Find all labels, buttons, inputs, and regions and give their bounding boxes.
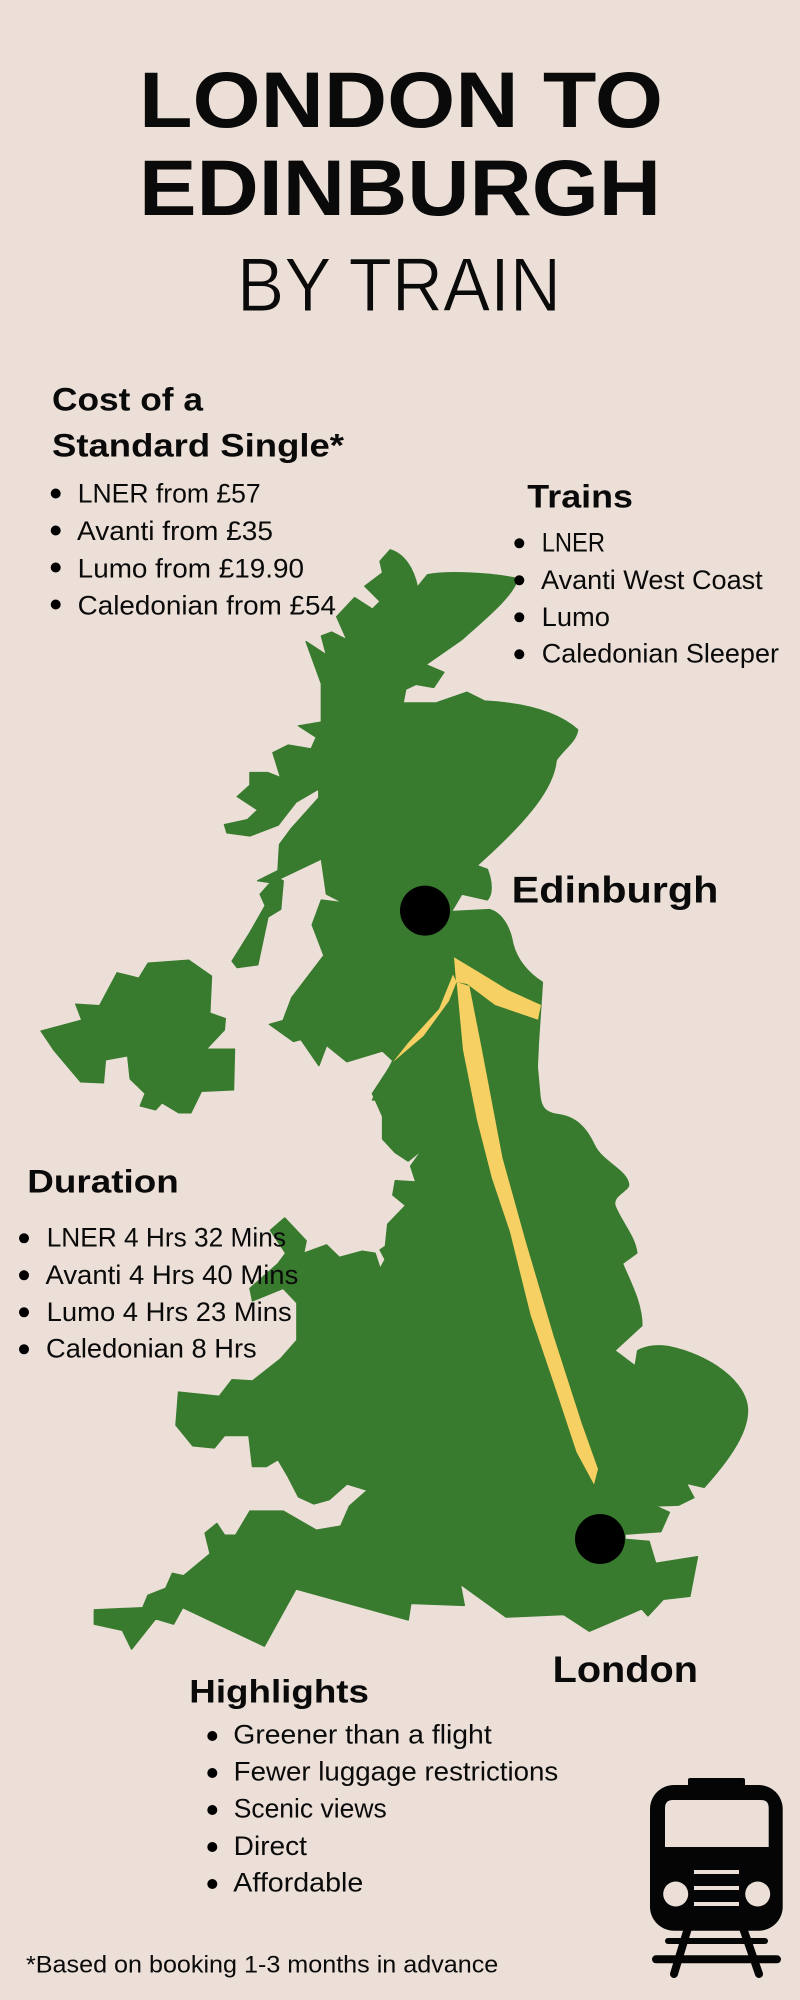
route lines (393, 957, 598, 1484)
label: London: London (553, 1649, 698, 1690)
route: west branch (393, 974, 457, 1062)
panel: trains: LNER (542, 528, 605, 558)
panel: highlights: Scenic views (234, 1794, 387, 1824)
panel: duration (19, 1164, 298, 1364)
panel: highlights: Greener than a flight (233, 1719, 492, 1749)
title: EDINBURGH (139, 143, 661, 232)
panel: trains: Lumo (542, 602, 610, 632)
title: BY TRAIN (237, 243, 561, 328)
panel: cost of a standard single: Caledonian from £54 (78, 590, 336, 620)
panel: trains: Trains (527, 478, 633, 514)
panel: highlights (189, 1674, 558, 1898)
panel: cost of a standard single: LNER from £57 (78, 479, 261, 509)
panel: cost of a standard single: Lumo from £19.90 (78, 553, 304, 583)
label: Edinburgh: Edinburgh (512, 870, 718, 911)
map marker: London (575, 1514, 625, 1564)
panel: highlights: Fewer luggage restrictions (234, 1757, 558, 1787)
map of Great Britain and Ireland (41, 550, 747, 1649)
panel: cost of a standard single (51, 382, 345, 620)
panel: duration: LNER 4 Hrs 32 Mins (47, 1223, 286, 1253)
panel: duration: Duration (27, 1164, 179, 1200)
route: main line to London (457, 982, 598, 1484)
panel: highlights: Direct (234, 1831, 308, 1861)
panel: duration: Lumo 4 Hrs 23 Mins (47, 1297, 292, 1327)
panel: duration: Caledonian 8 Hrs (46, 1334, 257, 1364)
footnote: *Based on booking 1-3 months in advance (26, 1952, 498, 1979)
panel: trains: Avanti West Coast (541, 565, 763, 595)
panel: highlights: Highlights (189, 1674, 369, 1710)
title: LONDON TO (139, 55, 663, 144)
panel: cost of a standard single: Avanti from £35 (77, 516, 273, 546)
icon: train (650, 1778, 783, 1974)
panel: trains: Caledonian Sleeper (542, 639, 779, 669)
panel: duration: Avanti 4 Hrs 40 Mins (46, 1260, 298, 1290)
title (139, 55, 663, 328)
map marker: Edinburgh (400, 886, 450, 936)
panel: highlights: Affordable (233, 1868, 363, 1898)
route: east branch (454, 957, 541, 1020)
panel: trains (514, 478, 779, 669)
map: England and Wales (94, 1050, 747, 1649)
map: Scotland and northern England (224, 550, 578, 1100)
map: Ireland (41, 960, 235, 1113)
panel: cost of a standard single: Standard Single* (52, 428, 345, 464)
panel: cost of a standard single: Cost of a (52, 382, 203, 418)
